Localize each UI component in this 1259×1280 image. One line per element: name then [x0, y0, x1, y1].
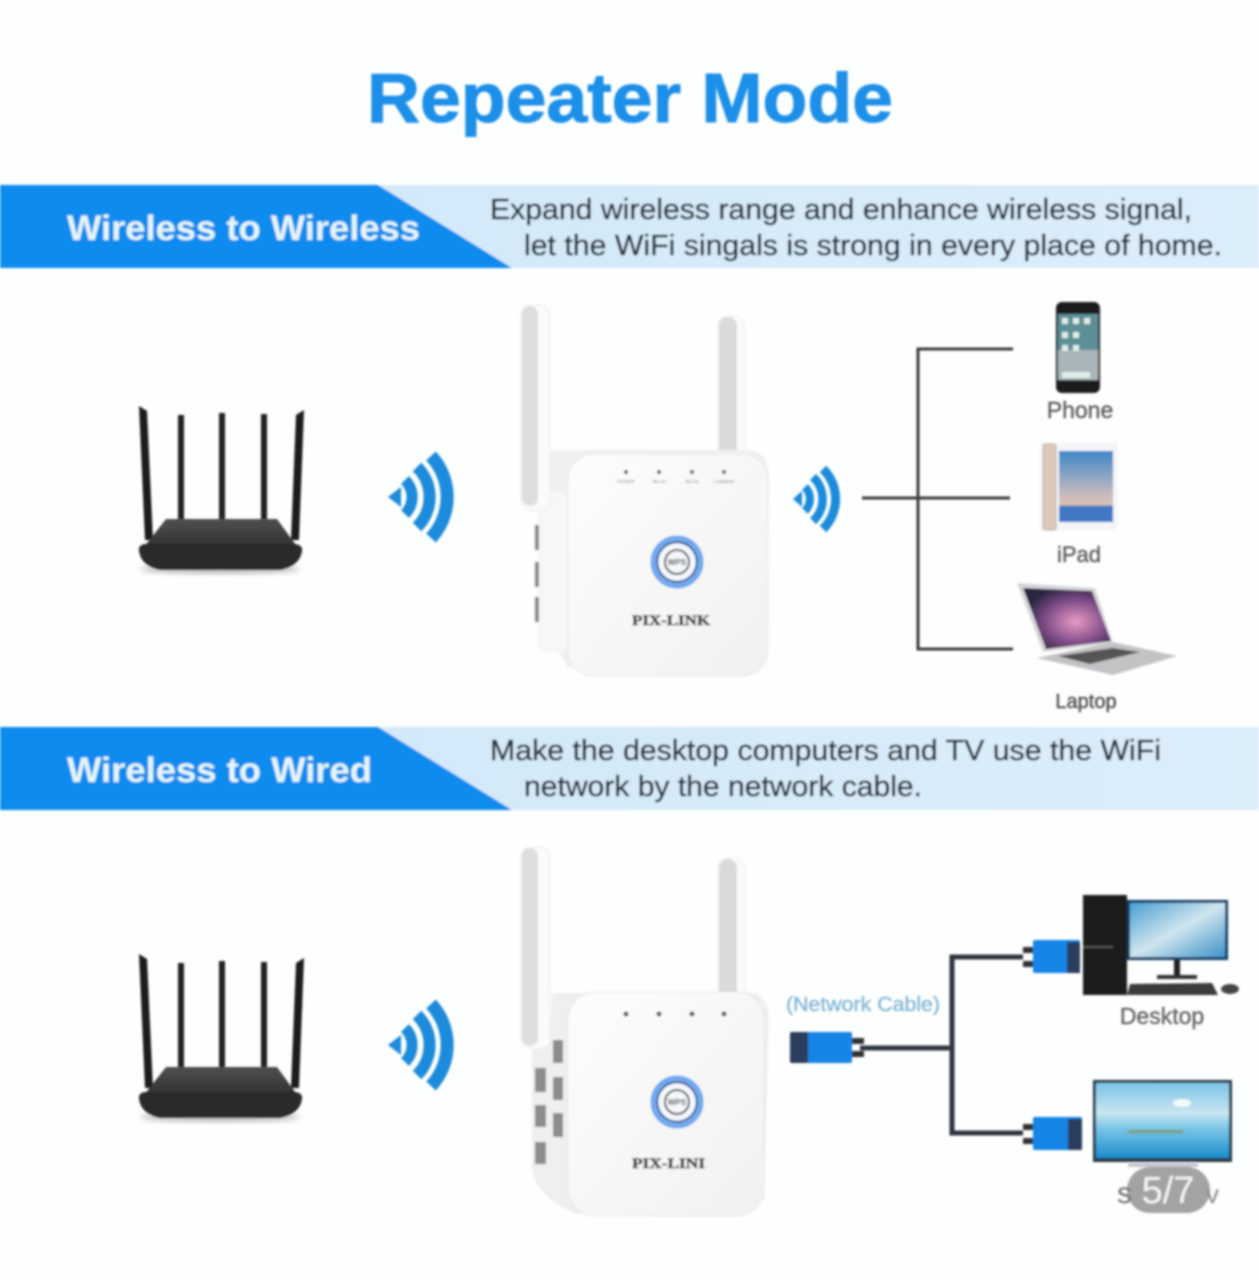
left antenna [521, 847, 550, 1049]
image counter badge: 5/7 [1142, 1170, 1194, 1212]
router: top [139, 406, 304, 574]
device body [535, 450, 769, 676]
right antenna [718, 858, 745, 1003]
status LEDs: LAN/WAN [714, 479, 734, 484]
plug: input [790, 1032, 864, 1063]
right antenna [718, 316, 745, 461]
label: desktop: Desktop [1120, 1003, 1204, 1029]
icon: desktop computer [1083, 895, 1239, 995]
title: Repeater Mode [367, 59, 893, 137]
banner heading: wireless to wireless: Wireless to Wireless [67, 209, 420, 248]
plug: TV [1023, 1117, 1082, 1150]
WPS button [653, 1078, 701, 1126]
banner: wireless to wired [0, 727, 1259, 810]
device body [532, 992, 769, 1216]
icon: wifi signal to devices [793, 469, 836, 529]
label: network cable: (Network Cable) [786, 994, 940, 1016]
image counter badge: s [1117, 1177, 1132, 1210]
network cable [790, 940, 1082, 1150]
brand logo: PIX-LINI [632, 1156, 705, 1172]
icon: wifi signal top left [388, 456, 447, 538]
label: phone: Phone [1047, 397, 1113, 423]
status LEDs: WLAN [652, 479, 666, 484]
icon: wifi signal bottom left [388, 1004, 447, 1086]
banner heading: wireless to wired: Wireless to Wired [67, 751, 372, 790]
label: iPad: iPad [1057, 542, 1101, 567]
banner description: wireless to wired: network by the network cable. [524, 771, 922, 803]
status LEDs [617, 470, 734, 484]
status LEDs [624, 1012, 726, 1016]
image counter badge: v [1206, 1179, 1219, 1209]
banner description: wireless to wireless [490, 194, 1222, 262]
plug: desktop [1023, 940, 1080, 973]
icon: laptop [1017, 583, 1177, 675]
icon: iPad [1040, 443, 1117, 530]
repeater: bottom [521, 847, 769, 1216]
banner description: wireless to wired [490, 735, 1161, 803]
banner description: wireless to wireless: Expand wireless range and enhance wireless signal, [490, 194, 1192, 226]
label: laptop: Laptop [1055, 691, 1117, 713]
image counter badge [1117, 1167, 1219, 1213]
connector lines: devices [862, 349, 1013, 649]
WPS button: WPS [668, 1098, 687, 1107]
status LEDs: WLAN [685, 479, 699, 484]
router: bottom [139, 954, 304, 1122]
status LEDs: POWER [617, 479, 635, 484]
WPS button: WPS [668, 558, 687, 567]
WPS button [653, 538, 701, 586]
banner: wireless to wireless [0, 185, 1259, 268]
icon: TV [1093, 1080, 1232, 1167]
brand logo: PIX-LINK [632, 613, 710, 629]
banner description: wireless to wired: Make the desktop computers and TV use the WiFi [490, 735, 1161, 767]
icon: phone [1056, 302, 1100, 393]
banner description: wireless to wireless: let the WiFi singals is strong in every place of home. [524, 230, 1222, 262]
left antenna [521, 305, 550, 510]
repeater: top [521, 305, 769, 676]
